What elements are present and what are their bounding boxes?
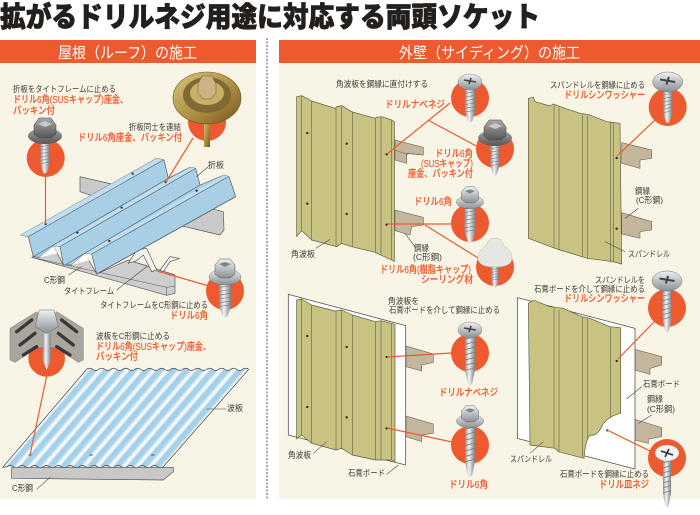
label: furring 3: 鋼縁 xyxy=(647,394,663,404)
label: spandrel: スパンドレル xyxy=(628,249,670,259)
label: furring: 鋼縁 xyxy=(414,243,429,253)
label: resin cap xyxy=(380,263,473,286)
callout: angle siding over board: 石膏ボードを介して鋼縁に止める xyxy=(389,305,500,315)
title: 拡がるドリルネジ用途に対応する両頭ソケット xyxy=(0,0,540,32)
callout: spandrel over board: ドリルシンワッシャー xyxy=(564,293,645,305)
icon: screw, drill hex xyxy=(206,259,244,318)
callout: board to furring xyxy=(560,469,649,491)
icon: flat head screw xyxy=(648,439,686,508)
callout: spandrel direct: ドリルシンワッシャー xyxy=(564,90,645,102)
label: resin cap: ドリル6角(樹脂キャップ) xyxy=(380,263,471,276)
callout: angle siding over board: 角波板を xyxy=(388,296,419,306)
label: folded plate: 折板 xyxy=(208,160,224,170)
callout: tight frame to C steel: ドリル6角 xyxy=(170,309,208,322)
callout: angle siding over board xyxy=(388,296,500,315)
label: C steel lower: C形鋼 xyxy=(12,483,33,493)
callout: corrugated sheet to C steel: 波板をC形鋼に止める xyxy=(96,331,170,341)
label: furring 2: (C形鋼) xyxy=(636,195,663,205)
callout: folded plate to tight frame: 折板をタイトフレームに止める xyxy=(13,84,116,94)
label: hex SUS: (SUSキャップ) xyxy=(421,158,473,170)
icon: pan head screw long xyxy=(451,322,489,386)
label: C steel: C形鋼 xyxy=(44,275,65,285)
callout: board to furring: ドリル皿ネジ xyxy=(599,479,649,491)
label: furring 3: (C形鋼) xyxy=(647,404,675,414)
diagram: spandrel direct xyxy=(528,97,652,264)
icon: screw with bracket washer xyxy=(10,310,83,377)
label: furring 3 xyxy=(647,394,675,414)
icon: hex screw long xyxy=(451,406,489,478)
label: spandrel 2: スパンドレル xyxy=(510,454,552,464)
wall heading xyxy=(279,40,700,63)
icon: hex SUS cap screw xyxy=(476,120,514,176)
callout: folded plate to tight frame: ドリル6角(SUSキャップ)座金、 xyxy=(13,93,128,106)
label: tight frame: タイトフレーム xyxy=(64,286,114,296)
diagram: angle siding over gypsum board xyxy=(288,294,433,474)
panel: roof xyxy=(0,40,256,499)
icon: screw, drill hex with SUS cap xyxy=(27,118,65,177)
label: hex SUS: ドリル6角 xyxy=(435,147,473,160)
label: furring 2: 鋼縁 xyxy=(635,186,650,196)
icon: hex screw xyxy=(451,187,489,243)
icon: thin washer screw on board xyxy=(648,271,686,333)
panel: exterior wall xyxy=(279,40,700,508)
callout lines: roof xyxy=(30,138,209,455)
diagram: spandrel over gypsum board xyxy=(517,298,662,469)
icon: screw, drill hex with large washer xyxy=(173,72,241,147)
corrugated sheet diagram xyxy=(3,368,249,489)
callout: folded plates joined: ドリル6角座金、パッキン付 xyxy=(78,131,182,144)
label: furring: (C形鋼) xyxy=(413,252,442,262)
label: gypsum board: 石膏ボード xyxy=(348,468,385,478)
callout: folded plate to tight frame xyxy=(13,84,128,117)
label: corrugated sheet: 波板 xyxy=(227,403,243,413)
icon: thin washer screw xyxy=(649,72,687,126)
callout: tight frame to C steel: タイトフレームをC形鋼に止める xyxy=(100,300,208,310)
label: furring xyxy=(413,243,442,262)
folded plate roof diagram xyxy=(21,158,236,295)
callout: board to furring: 石膏ボードを鋼縁に止める xyxy=(560,469,649,479)
diagram: angle siding direct xyxy=(297,96,423,262)
callout: folded plates joined xyxy=(78,122,182,144)
callout: corrugated sheet to C steel xyxy=(96,331,211,363)
callout: direct fix: 角波板を鋼縁に直付けする xyxy=(336,79,428,89)
label: pan head 2: ドリルナベネジ xyxy=(439,387,498,399)
callout: corrugated sheet to C steel: パッキン付 xyxy=(96,350,138,363)
label: resin cap: シーリング材 xyxy=(421,273,473,286)
label: hex 2: ドリル6角 xyxy=(449,478,488,491)
label: hex: ドリル6角 xyxy=(414,195,452,208)
label: pan head: ドリルナベネジ xyxy=(385,99,445,111)
callout: spandrel over board xyxy=(534,275,645,305)
callout: folded plates joined: 折板同士を連結 xyxy=(129,122,181,132)
divider xyxy=(266,38,268,499)
label: angle siding 2: 角波板 xyxy=(288,450,311,460)
roof heading: 屋根（ルーフ）の施工 xyxy=(58,44,197,62)
callout lines: wall xyxy=(387,103,655,451)
roof heading xyxy=(0,40,256,63)
callout: spandrel over board: スパンドレルを xyxy=(595,275,645,285)
icon: pan head drill screw xyxy=(451,74,489,123)
label: angle siding: 角波板 xyxy=(291,249,315,259)
callout: corrugated sheet to C steel: ドリル6角(SUSキャップ)座金、 xyxy=(96,340,211,353)
label: hex SUS xyxy=(408,147,473,180)
callout: spandrel direct: スパンドレルを鋼縁に止める xyxy=(550,80,645,90)
callout: folded plate to tight frame: パッキン付 xyxy=(13,104,55,117)
callout: spandrel over board: 石膏ボードを介して鋼縁に止める xyxy=(534,284,645,294)
callout: spandrel direct xyxy=(550,80,645,102)
icon: resin cap screw xyxy=(476,238,514,288)
callout: tight frame to C steel xyxy=(100,300,208,322)
wall heading: 外壁（サイディング）の施工 xyxy=(399,43,580,62)
label: gypsum board 2: 石膏ボード xyxy=(643,379,680,389)
label: hex SUS: 座金、パッキン付 xyxy=(408,167,473,180)
label: furring 2 xyxy=(635,186,663,205)
